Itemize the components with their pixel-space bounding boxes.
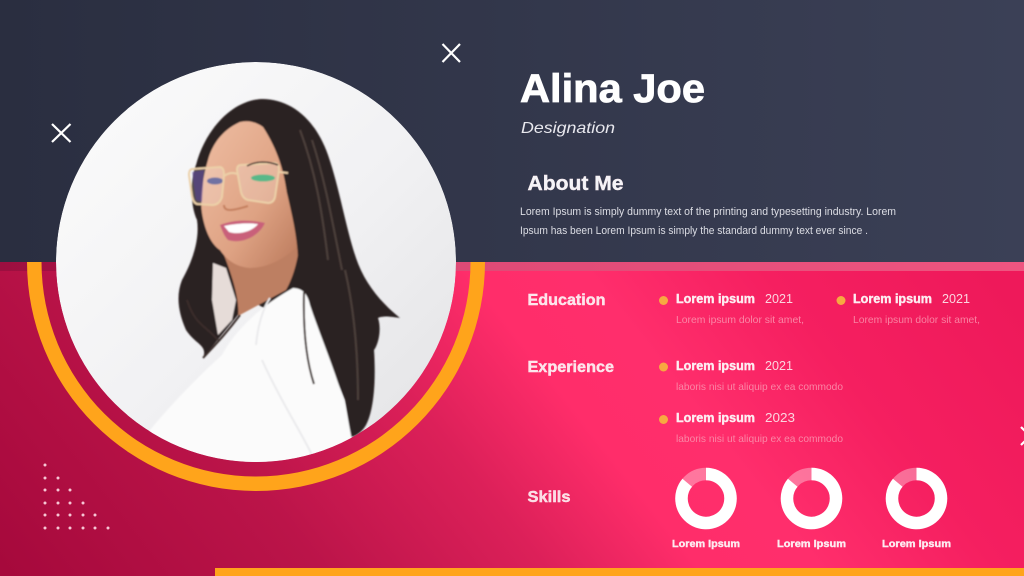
education item 1: Lorem ipsum dolor sit amet, xyxy=(676,314,804,326)
right eye xyxy=(251,174,275,182)
experience section xyxy=(528,359,843,445)
nose xyxy=(224,205,248,210)
experience item 1 xyxy=(659,359,843,393)
hair highlights xyxy=(300,130,358,400)
skill donut 1 xyxy=(672,474,740,550)
pink divider strip xyxy=(0,262,1024,271)
teeth xyxy=(224,223,258,233)
dot triangle xyxy=(44,464,110,530)
orange bottom bar xyxy=(215,568,1024,576)
designation: Designation xyxy=(521,120,615,137)
portrait photo xyxy=(56,62,456,470)
skill donut 2 xyxy=(777,474,846,550)
smile xyxy=(220,221,265,241)
education section xyxy=(528,292,980,326)
skill donut 1: Lorem Ipsum xyxy=(672,538,740,550)
orange half ring xyxy=(27,262,485,491)
dark top background xyxy=(0,0,1024,263)
about me heading: About Me xyxy=(528,173,624,195)
decorative x right xyxy=(1021,427,1024,445)
education item 2 xyxy=(836,292,980,326)
education heading: Education xyxy=(528,292,606,309)
skills heading: Skills xyxy=(528,489,570,506)
experience item 1: 2021 xyxy=(765,359,793,373)
shirt folds xyxy=(256,298,312,455)
experience item 2: laboris nisi ut aliquip ex ea commodo xyxy=(676,433,843,445)
experience item 2: Lorem ipsum xyxy=(676,411,755,425)
education item 1: 2021 xyxy=(765,292,793,306)
crimson lower background xyxy=(0,262,1024,576)
experience item 1: Lorem ipsum xyxy=(676,359,755,373)
skill donut 3: Lorem Ipsum xyxy=(882,538,951,550)
experience item 2 xyxy=(659,411,843,445)
about me text: Ipsum has been Lorem Ipsum is simply the standard dummy text ever since . xyxy=(520,225,868,237)
about me text: Lorem Ipsum is simply dummy text of the printing and typesetting industry. Lorem xyxy=(520,206,896,218)
skill donut 3 xyxy=(882,474,951,550)
decorative x top xyxy=(442,44,460,62)
experience item 2: 2023 xyxy=(765,411,795,425)
hair back xyxy=(179,99,400,437)
hair strands over shirt xyxy=(187,292,314,384)
collar patch xyxy=(212,263,236,335)
hair side xyxy=(286,186,302,256)
education item 1: Lorem ipsum xyxy=(676,292,755,306)
lens tint xyxy=(192,170,204,202)
neck xyxy=(222,240,300,316)
white shirt xyxy=(148,286,353,462)
eyebrow xyxy=(247,162,278,166)
decorative x left xyxy=(52,124,70,142)
skill donut 2: Lorem Ipsum xyxy=(777,538,846,550)
education item 2: Lorem ipsum dolor sit amet, xyxy=(853,314,980,326)
education item 2: 2021 xyxy=(942,292,970,306)
education item 2: Lorem ipsum xyxy=(853,292,932,306)
about me text xyxy=(520,206,896,237)
left eye xyxy=(207,178,223,184)
name heading: Alina Joe xyxy=(520,67,705,111)
experience item 1: laboris nisi ut aliquip ex ea commodo xyxy=(676,381,843,393)
skills section xyxy=(528,474,951,550)
education item 1 xyxy=(659,292,804,326)
experience heading: Experience xyxy=(528,359,614,376)
glasses xyxy=(189,163,288,205)
face xyxy=(201,121,297,268)
